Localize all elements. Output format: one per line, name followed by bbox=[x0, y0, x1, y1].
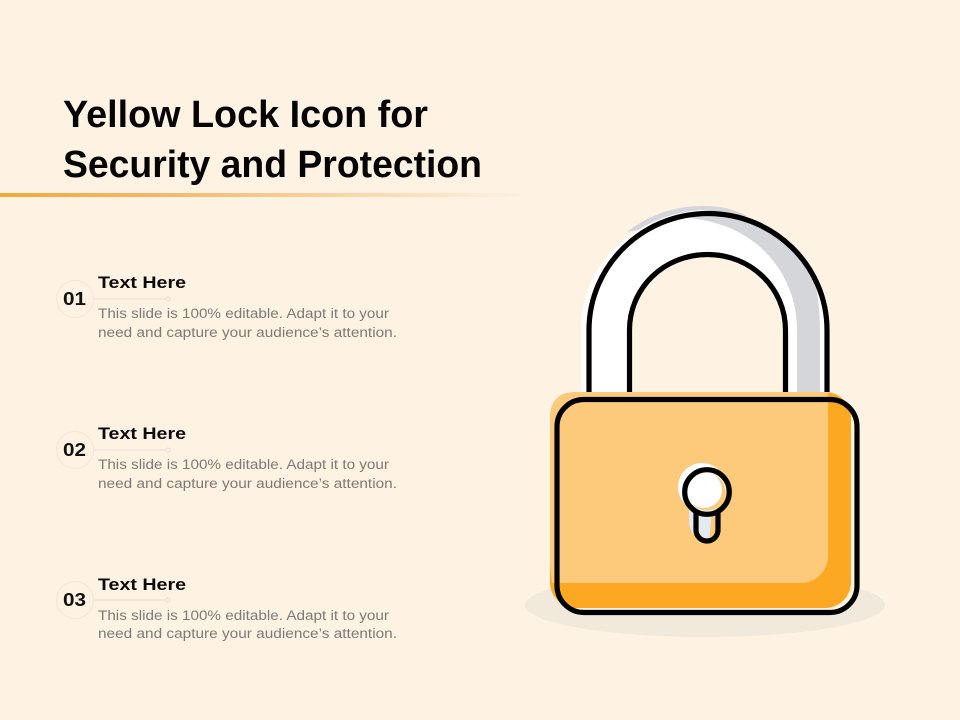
list item 02: This slide is 100% editable. Adapt it to your bbox=[98, 457, 390, 472]
keyhole bbox=[678, 463, 729, 541]
icon: padlock bbox=[525, 206, 885, 637]
list item 01: This slide is 100% editable. Adapt it to your bbox=[98, 306, 390, 321]
list item 01: Text Here bbox=[98, 273, 186, 292]
title: Security and Protection bbox=[63, 144, 482, 186]
list item 01: 01 bbox=[63, 289, 86, 309]
list item 03: This slide is 100% editable. Adapt it to your bbox=[98, 608, 390, 623]
list item 01: need and capture your audience’s attention. bbox=[98, 325, 397, 340]
title: Yellow Lock Icon for bbox=[63, 94, 428, 136]
list item 02: 02 bbox=[63, 440, 86, 460]
lock body bbox=[550, 392, 857, 612]
ground shadow bbox=[525, 573, 885, 637]
shackle bbox=[581, 206, 827, 392]
list item 02: need and capture your audience’s attention. bbox=[98, 476, 397, 491]
list item 03: need and capture your audience’s attention. bbox=[98, 626, 397, 641]
list item 02: Text Here bbox=[98, 424, 186, 443]
title underline bbox=[0, 193, 525, 197]
list item 03: Text Here bbox=[98, 575, 186, 594]
title bbox=[63, 94, 482, 186]
list item 03 bbox=[56, 575, 397, 641]
list item 01 bbox=[56, 273, 397, 340]
list item 02 bbox=[56, 424, 397, 491]
list item 03: 03 bbox=[63, 590, 86, 610]
